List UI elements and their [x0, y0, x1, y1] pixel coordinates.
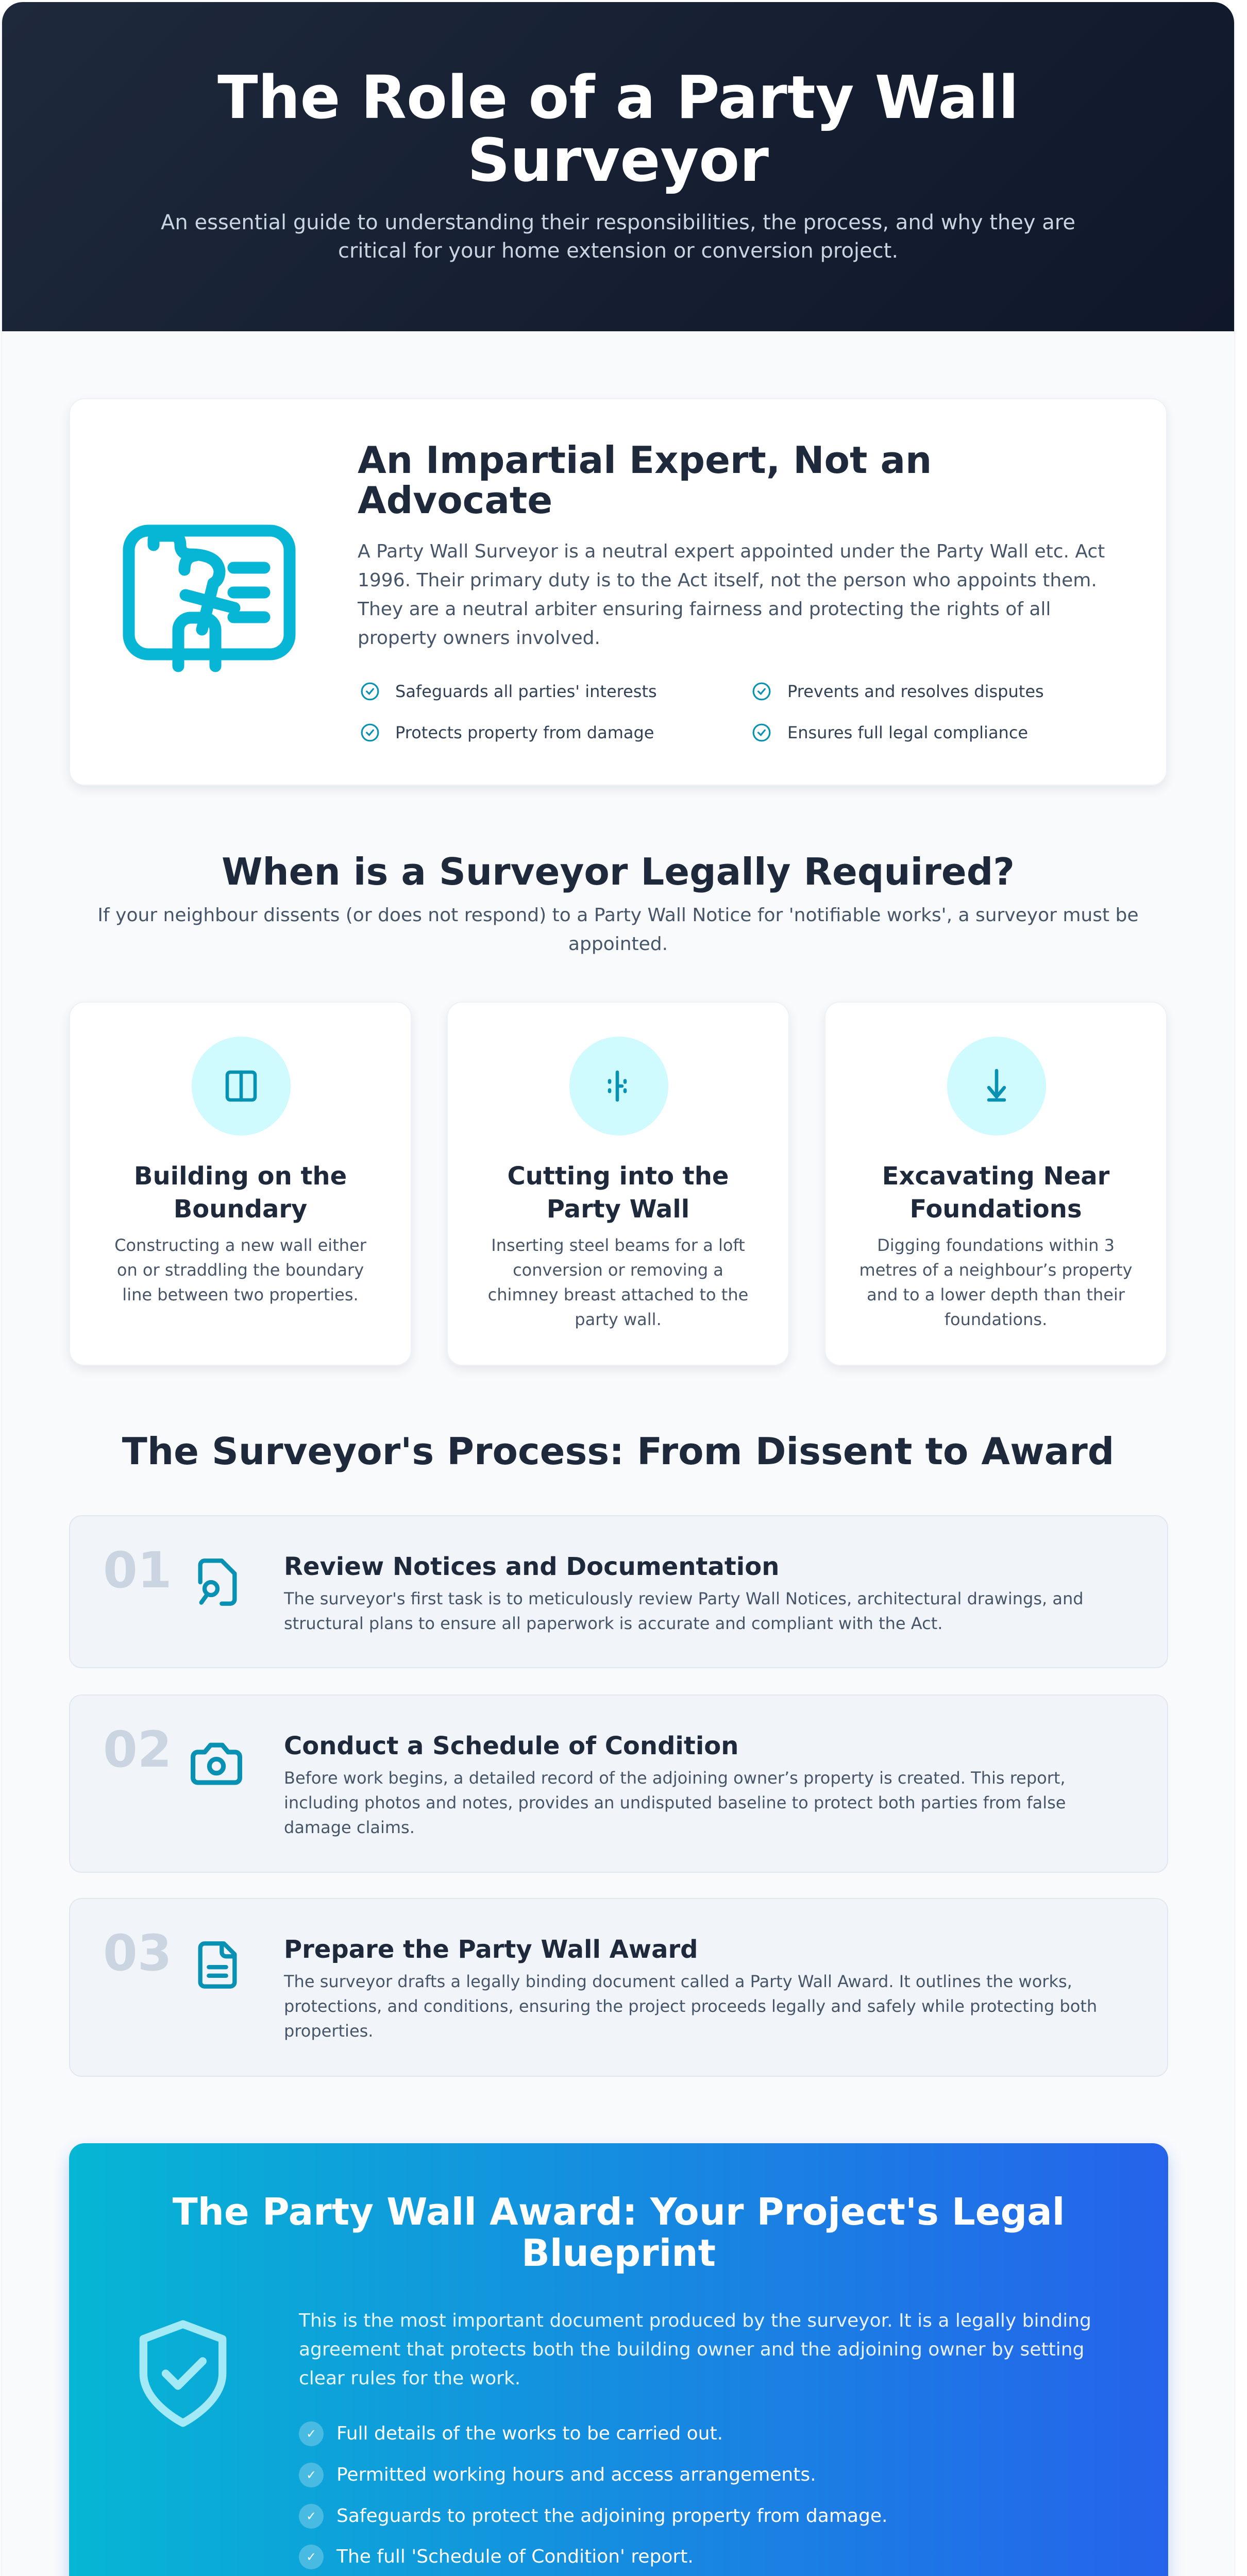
step 03: [69, 1898, 1168, 2077]
step text: Before work begins, a detailed record of the adjoining owner’s property is created. This report,: [284, 1768, 1066, 1788]
card: excavating: [824, 1002, 1167, 1366]
award body: agreement that protects both the building owner and the adjoining owner by setting: [299, 2339, 1084, 2360]
step text: protections, and conditions, ensuring the project proceeds legally and safely while protecting both: [284, 1996, 1097, 2016]
subtitle: when required: [97, 905, 1139, 955]
step text: structural plans to ensure all paperwork is accurate and compliant with the Act.: [284, 1614, 942, 1633]
card title: Cutting into the: [508, 1162, 729, 1191]
award list: [299, 2421, 887, 2569]
subtitle: critical for your home extension or conversion project.: [338, 239, 898, 263]
number: 03: [103, 1924, 172, 1982]
heading: [358, 438, 932, 522]
panel: impartial expert: [69, 398, 1167, 786]
card title: [882, 1162, 1110, 1224]
title: Surveyor: [467, 126, 769, 195]
card title: Building on the: [134, 1162, 347, 1191]
icon: arrow down: [947, 1037, 1046, 1136]
step text: damage claims.: [284, 1818, 415, 1837]
award list: The full 'Schedule of Condition' report.: [336, 2546, 694, 2567]
award list: Permitted working hours and access arrangements.: [336, 2464, 816, 2485]
card title: Excavating Near: [882, 1162, 1109, 1191]
icon: columns: [192, 1037, 291, 1136]
checklist: Protects property from damage: [395, 723, 654, 742]
card text: conversion or removing a: [513, 1260, 723, 1280]
heading: Advocate: [358, 479, 552, 522]
card text: Digging foundations within 3: [877, 1235, 1115, 1255]
card text: and to a lower depth than their: [867, 1285, 1125, 1304]
step text: [284, 1768, 1066, 1837]
award list: ✓: [306, 2550, 316, 2564]
card title: [508, 1162, 729, 1224]
icon: impartial document: [123, 524, 296, 672]
icon: file text: [198, 1941, 237, 1989]
card text: [860, 1235, 1132, 1329]
step text: properties.: [284, 2021, 373, 2041]
checklist: Prevents and resolves disputes: [787, 682, 1044, 701]
subtitle: when required: If your neighbour dissents (or does not respond) to a Party Wall Notice for 'notifiable works', a surveyor must be: [97, 905, 1139, 926]
card text: metres of a neighbour’s property: [860, 1260, 1132, 1280]
step text: [283, 1589, 1084, 1633]
card text: on or straddling the boundary: [117, 1260, 364, 1280]
card title: Party Wall: [547, 1195, 689, 1224]
body text: [358, 541, 1105, 649]
icon: file search: [198, 1558, 237, 1606]
card: cutting into party wall: [447, 1002, 789, 1366]
award list: Safeguards to protect the adjoining property from damage.: [336, 2505, 887, 2527]
body text: A Party Wall Surveyor is a neutral expert appointed under the Party Wall etc. Act: [358, 541, 1105, 562]
panel: party wall award: [69, 2143, 1168, 2576]
icon: camera: [191, 1742, 242, 1785]
award list: ✓: [306, 2509, 316, 2523]
award list: Full details of the works to be carried out.: [336, 2423, 723, 2444]
card: building on boundary: [69, 1002, 412, 1366]
subtitle: [161, 211, 1075, 263]
heading: when required: When is a Surveyor Legally Required?: [222, 850, 1015, 893]
card text: chimney breast attached to the: [488, 1285, 748, 1304]
award list: ✓: [306, 2427, 316, 2441]
step title: Review Notices and Documentation: [284, 1552, 779, 1581]
checklist: Ensures full legal compliance: [787, 723, 1028, 742]
title: [217, 63, 1019, 195]
number: 01: [103, 1541, 172, 1599]
award body: clear rules for the work.: [299, 2368, 520, 2389]
card text: party wall.: [575, 1310, 662, 1329]
award body: This is the most important document produced by the surveyor. It is a legally binding: [299, 2310, 1091, 2331]
step text: including photos and notes, provides an undisputed baseline to protect both parties from false: [284, 1793, 1066, 1812]
award body: [299, 2310, 1091, 2389]
award title: Blueprint: [521, 2231, 716, 2275]
header: [2, 2, 1234, 331]
icon: shield check: [139, 2320, 227, 2427]
step 02: [69, 1694, 1168, 1873]
checklist: Safeguards all parties' interests: [395, 682, 657, 701]
step text: The surveyor's first task is to meticulously review Party Wall Notices, architectural drawings, and: [284, 1589, 1084, 1608]
step 01: [69, 1515, 1168, 1668]
body text: 1996. Their primary duty is to the Act itself, not the person who appoints them.: [358, 570, 1097, 591]
card title: Foundations: [909, 1195, 1082, 1224]
card title: [134, 1162, 347, 1224]
card text: [114, 1235, 366, 1304]
body text: They are a neutral arbiter ensuring fairness and protecting the rights of all: [358, 599, 1051, 620]
award list: ✓: [306, 2468, 316, 2482]
step title: Prepare the Party Wall Award: [284, 1935, 698, 1964]
card text: [488, 1235, 748, 1329]
award title: The Party Wall Award: Your Project's Legal: [173, 2190, 1065, 2233]
card text: line between two properties.: [122, 1285, 359, 1304]
number: 02: [103, 1721, 172, 1778]
heading: An Impartial Expert, Not an: [358, 438, 932, 482]
card text: foundations.: [945, 1310, 1047, 1329]
step title: Conduct a Schedule of Condition: [284, 1732, 738, 1760]
subtitle: An essential guide to understanding their responsibilities, the process, and why they are: [161, 211, 1075, 234]
body text: property owners involved.: [358, 628, 600, 649]
step text: [283, 1972, 1097, 2041]
icon: split: [569, 1037, 668, 1136]
heading: process: The Surveyor's Process: From Dissent to Award: [122, 1430, 1114, 1473]
subtitle: when required: appointed.: [568, 934, 668, 955]
card text: Inserting steel beams for a loft: [491, 1235, 745, 1255]
card text: Constructing a new wall either: [114, 1235, 366, 1255]
card title: Boundary: [174, 1195, 307, 1224]
title: The Role of a Party Wall: [217, 63, 1019, 132]
award title: [172, 2190, 1065, 2275]
step text: The surveyor drafts a legally binding document called a Party Wall Award. It outlines the works,: [284, 1972, 1072, 1991]
checklist: [361, 682, 1044, 742]
